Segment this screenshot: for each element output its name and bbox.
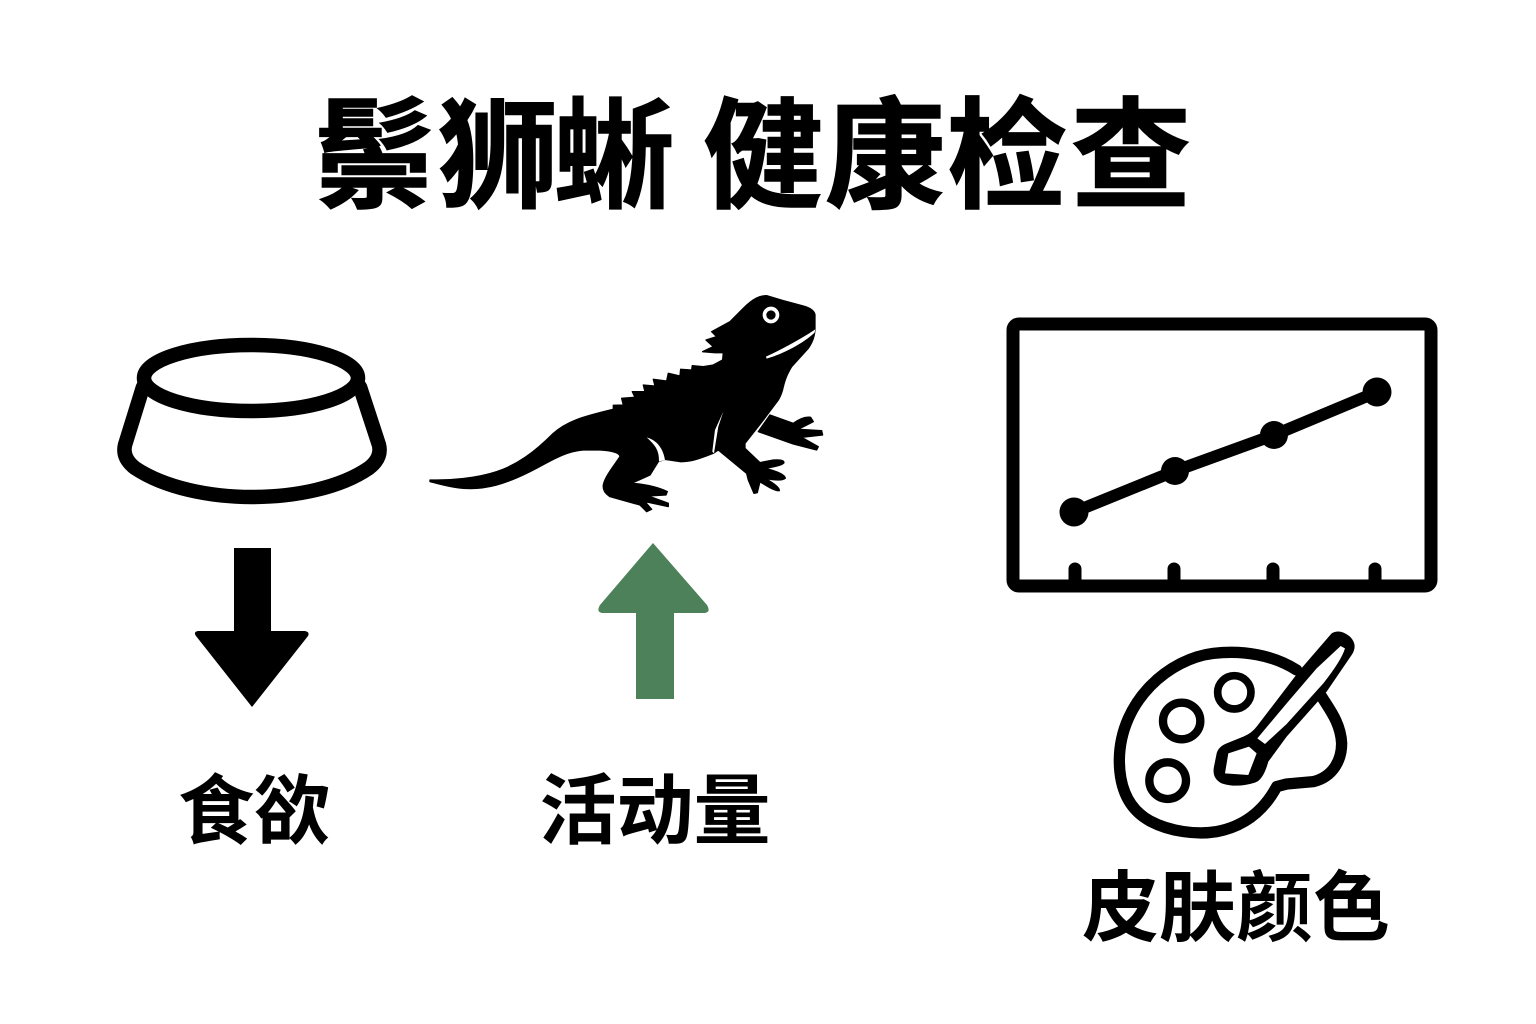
icon: bearded dragon lizard (430, 296, 823, 512)
label: activity level: 活动量 (540, 769, 770, 855)
arrow: appetite down (195, 548, 309, 707)
icon: food bowl (124, 345, 380, 497)
label: skin colour: 皮肤颜色 (1082, 866, 1390, 952)
arrow: activity up (598, 543, 709, 699)
label: appetite: 食欲 (178, 770, 330, 855)
icon: line chart in frame (1013, 324, 1431, 586)
icon: paint palette with brush (1119, 631, 1355, 833)
title: 鬃狮蜥 健康检查 (314, 90, 1191, 224)
